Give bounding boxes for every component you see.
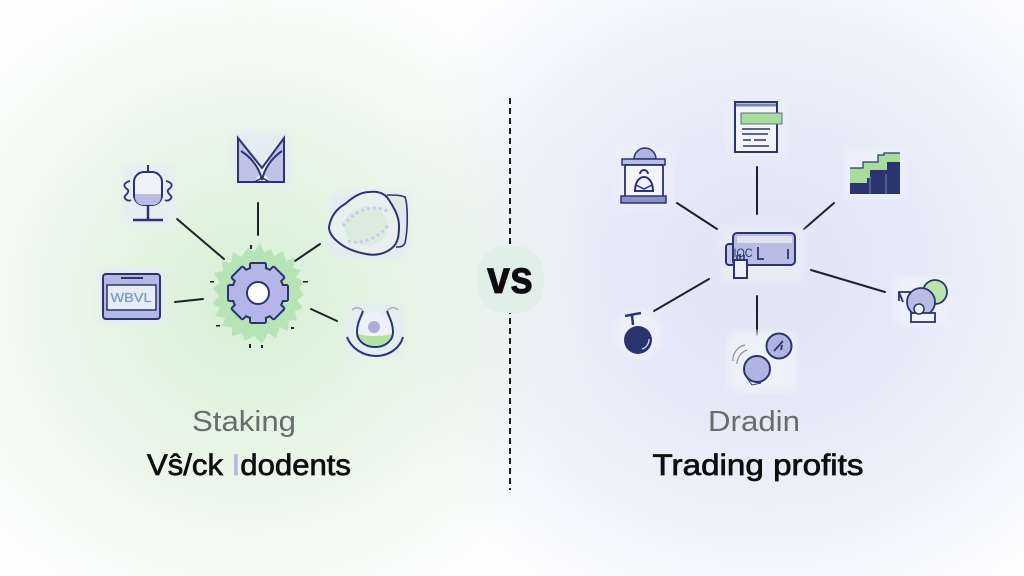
icon: central card with hand: IOC <box>734 246 753 260</box>
panel: trading <box>614 96 950 482</box>
icon: coins with motion arcs <box>728 332 796 392</box>
icon: central gear with green burst <box>210 243 308 348</box>
icon: central card with hand <box>722 226 804 284</box>
icon: stone blob <box>329 192 408 258</box>
divider: dashed vertical line <box>509 98 511 490</box>
icon: M emblem <box>232 132 290 188</box>
panel: staking <box>98 132 408 482</box>
vs badge: vs <box>487 251 533 303</box>
connector lines: trading <box>654 167 885 335</box>
icon: wave screen: WBVL <box>110 290 152 305</box>
icon: document <box>728 96 786 158</box>
vs badge <box>477 246 544 313</box>
icon: bank building <box>616 146 672 208</box>
heading: Staking: Staking <box>192 406 296 438</box>
icon: bowl with orb <box>346 304 404 358</box>
subheading: staking label: Vŝ/ck Idodents <box>147 449 351 482</box>
subheading: Trading profits: Trading profits <box>652 449 864 482</box>
heading: Dradin: Dradin <box>708 406 800 438</box>
icon: wave screen <box>98 268 166 324</box>
icon: weight ball <box>614 311 662 359</box>
icon: microphone <box>122 165 174 227</box>
icon: coins and pie <box>894 276 950 326</box>
icon: rising bar chart <box>845 148 905 198</box>
connector lines: staking <box>175 203 337 321</box>
